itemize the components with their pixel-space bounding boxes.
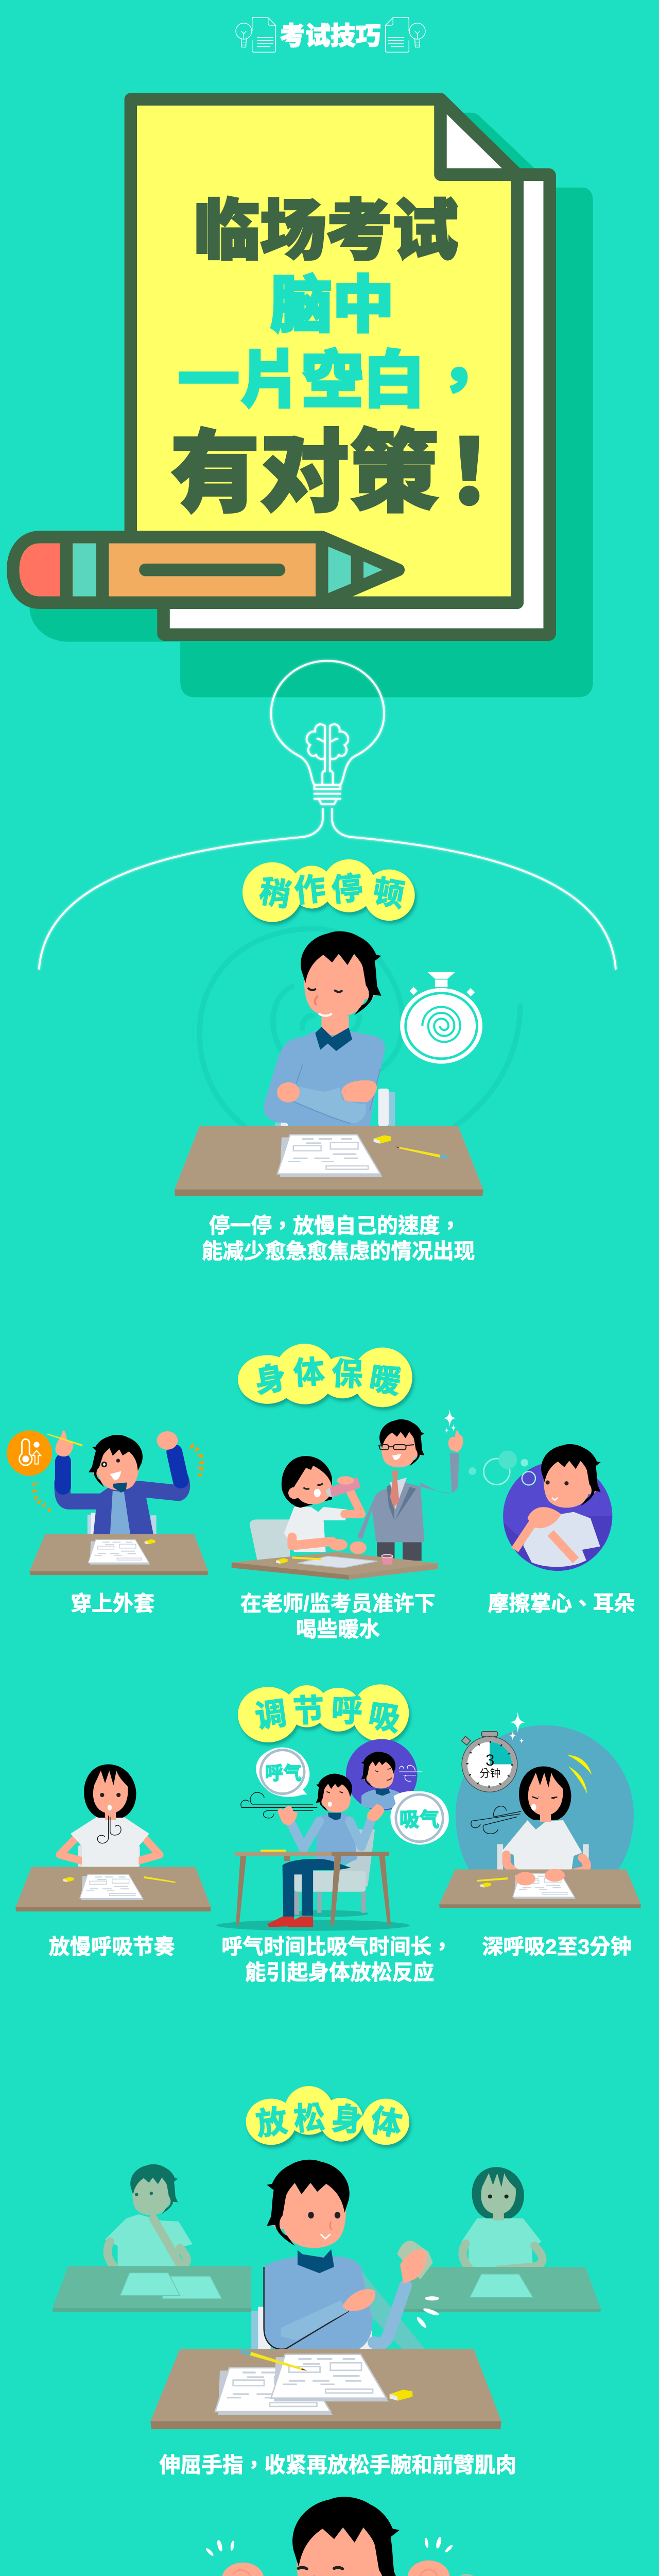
wind lines <box>471 1806 521 1834</box>
shirt <box>461 2217 541 2267</box>
blue circle <box>456 1725 634 1870</box>
back white sheet <box>164 175 550 635</box>
chair <box>251 2307 372 2349</box>
fists and pencil <box>47 1431 178 1456</box>
icon: stopwatch with spiral <box>400 972 482 1064</box>
caption: pause: 停一停，放慢自己的速度， <box>209 1214 461 1238</box>
desk <box>175 1126 483 1196</box>
title line 2: 脑中 <box>271 270 394 340</box>
badge text: 停 <box>330 870 364 908</box>
student chair <box>250 1519 290 1561</box>
wrist hand <box>342 2289 375 2311</box>
badge cloud <box>238 1344 412 1407</box>
section: header and title <box>13 18 593 697</box>
student arm <box>292 1487 361 1546</box>
hands <box>277 1080 377 1103</box>
captions: breathing: 放慢呼吸节奏 <box>49 1935 175 1959</box>
background desk left <box>53 2266 251 2312</box>
bubbles <box>469 1451 535 1485</box>
head <box>472 2167 524 2221</box>
breath swirl <box>97 1816 121 1843</box>
eraser <box>145 1539 155 1545</box>
section: keep warm and breathing <box>7 1344 641 1984</box>
arms <box>463 2244 542 2276</box>
boy stretching in jacket <box>47 1431 182 1534</box>
ghost hand <box>397 2241 433 2279</box>
title line 3: 一片空白 <box>178 346 425 415</box>
head <box>519 1767 571 1822</box>
background paper left <box>120 2273 222 2299</box>
pencil on desk <box>395 1146 448 1159</box>
face features <box>546 1480 568 1500</box>
closed eyes and mouth <box>530 1796 558 1810</box>
captions: keep warm: 穿上外套 <box>71 1592 154 1616</box>
main student stretching fingers <box>251 2160 472 2403</box>
badge text: 顿 <box>370 873 407 913</box>
speech bubble: inhale: 吸气 <box>399 1809 440 1831</box>
captions: breathing: 深呼吸2至3分钟 <box>482 1935 632 1959</box>
badge text <box>252 1354 404 1400</box>
badge cloud <box>242 859 415 922</box>
desk <box>232 1552 438 1580</box>
badge: pause <box>242 859 415 922</box>
badge text: 调 <box>253 1696 289 1734</box>
green shadow behind notepaper <box>180 113 593 697</box>
teacher lapel and tie <box>387 1471 416 1520</box>
student head <box>282 1456 332 1508</box>
pink bottle <box>326 1476 360 1497</box>
yellow front sheet <box>131 99 517 603</box>
exam paper <box>88 1540 150 1565</box>
legs <box>236 1856 391 1925</box>
wire right from bulb <box>332 809 616 969</box>
sparkles <box>509 1711 525 1744</box>
captions: keep warm: 在老师/监考员准许下 <box>240 1592 436 1616</box>
head <box>541 1444 601 1508</box>
eyes and mouth <box>375 1769 392 1780</box>
section: relax body <box>53 2086 601 2576</box>
badge text: 保 <box>331 1356 363 1393</box>
smiling man with fists <box>198 2497 466 2576</box>
badge: breathing <box>238 1684 409 1742</box>
motion ticks <box>415 2296 440 2329</box>
page fold <box>440 99 517 175</box>
head <box>130 2164 178 2215</box>
badge text <box>257 870 407 913</box>
purple circle <box>503 1462 612 1571</box>
teacher head <box>379 1419 424 1467</box>
arms <box>507 1855 587 1877</box>
purple circle <box>346 1739 418 1810</box>
arms <box>290 1821 371 1849</box>
boy inset in purple circle <box>346 1739 422 1810</box>
crossed arm <box>293 1086 366 1124</box>
paper on desk <box>298 1556 377 1568</box>
collar <box>375 1789 390 1796</box>
sweater <box>264 1031 385 1126</box>
fists <box>222 2561 449 2576</box>
icon: pencil <box>13 537 398 603</box>
title line 4: 有对策 <box>170 423 439 523</box>
badge: relax <box>246 2086 409 2145</box>
collar <box>298 2249 334 2273</box>
wire left from bulb <box>39 809 323 969</box>
paper, pencil, eraser, hands <box>477 1869 576 1899</box>
header: exam tips <box>236 18 425 52</box>
teacher OK hand <box>448 1430 463 1452</box>
motion ticks <box>205 2536 454 2557</box>
face features <box>101 1459 121 1480</box>
stopwatch: 分钟 <box>479 1768 500 1780</box>
icon: thermometer badge <box>7 1430 52 1476</box>
teacher trousers <box>377 1541 422 1561</box>
shirt <box>71 1816 149 1867</box>
chair <box>78 1845 140 1867</box>
desk <box>439 1870 641 1908</box>
decorative spiral behind boy <box>200 929 521 1126</box>
sweater <box>361 1789 403 1809</box>
fold triangle <box>440 99 517 175</box>
badge text: 稍 <box>257 873 293 913</box>
background paper right <box>470 2274 533 2297</box>
pencil and eraser <box>276 1556 321 1564</box>
exam paper <box>278 1135 383 1177</box>
eraser <box>390 2389 412 2401</box>
boy rubbing palms <box>469 1444 612 1571</box>
hands <box>329 1539 367 1554</box>
face features <box>308 2212 340 2239</box>
header title: 考试技巧 <box>280 23 381 50</box>
desk with legs <box>235 1850 391 1925</box>
face features <box>135 2192 153 2196</box>
sweater <box>316 1812 357 1863</box>
girl breathing slowly <box>60 1764 160 1867</box>
cup <box>381 1554 393 1565</box>
hands <box>278 1804 385 1825</box>
badge text <box>253 1692 403 1737</box>
title line 1: 临场考试 <box>194 194 458 268</box>
icon: document with bulb left <box>236 18 275 52</box>
speech bubble: exhale: 呼气 <box>265 1762 302 1784</box>
pencil <box>261 1850 286 1852</box>
head <box>267 2160 350 2248</box>
badge text: 暖 <box>367 1360 404 1400</box>
shirt <box>523 1512 600 1567</box>
left arm <box>62 1462 101 1501</box>
section: pause <box>39 661 616 1263</box>
chair <box>275 1089 395 1126</box>
pencil <box>239 2349 308 2371</box>
chair <box>294 1829 375 1915</box>
right arm <box>138 1452 182 1493</box>
girl deep breathing <box>456 1711 634 1877</box>
paper, eraser, pencil <box>63 1874 176 1900</box>
speech bubble: inhale <box>392 1792 447 1843</box>
ghost arm <box>361 2271 472 2403</box>
mouth <box>108 1805 112 1810</box>
title line 4: ！ <box>424 423 514 523</box>
tabletop <box>235 1852 389 1856</box>
head <box>301 931 381 1018</box>
neck <box>321 1016 349 1035</box>
wind lines white <box>399 1765 422 1781</box>
shirt <box>105 2214 193 2267</box>
background desk right <box>404 2267 601 2312</box>
badge text: 体 <box>292 1354 326 1391</box>
closed eyes, nose, smile <box>308 989 342 1016</box>
shirt front <box>110 1491 130 1534</box>
chair <box>88 1513 157 1534</box>
chair <box>497 1844 589 1870</box>
collar <box>113 1483 127 1493</box>
badge cloud <box>246 2086 409 2145</box>
left arm outline <box>264 2267 349 2349</box>
light bulb with brain <box>271 661 384 804</box>
fist <box>400 2250 427 2284</box>
title line 3: ， <box>428 346 490 415</box>
badge text: 吸 <box>366 1698 403 1737</box>
captions: breathing <box>49 1935 632 1984</box>
arms <box>60 1839 160 1863</box>
badge text: 作 <box>292 871 327 909</box>
shirt <box>501 1820 582 1870</box>
badge text <box>254 2099 405 2142</box>
right arm <box>374 2286 406 2344</box>
captions: keep warm <box>71 1592 635 1641</box>
trousers <box>283 1859 351 1917</box>
arms <box>108 2218 187 2276</box>
teacher and student <box>232 1409 463 1580</box>
caption: pause: 能减少愈急愈焦虑的情况出现 <box>202 1240 475 1263</box>
forearm <box>281 2300 349 2341</box>
icon: document with bulb right <box>386 18 425 52</box>
teacher jacket <box>357 1453 459 1542</box>
eyes and mouth <box>326 1792 343 1807</box>
badge cloud <box>238 1684 409 1742</box>
badge: keep warm <box>238 1344 412 1407</box>
student shirt <box>284 1507 346 1552</box>
speech bubble: exhale <box>257 1749 308 1795</box>
head <box>86 1431 145 1493</box>
seated boy with arms open <box>267 1774 385 1927</box>
badge text: 呼 <box>331 1692 363 1729</box>
green shadow behind pencil <box>29 605 189 642</box>
head <box>292 2497 400 2576</box>
background student right (faded) <box>461 2167 542 2276</box>
sweater <box>264 2257 372 2349</box>
stopwatch <box>462 1732 517 1792</box>
head <box>84 1764 136 1820</box>
captions: keep warm: 摩擦掌心、耳朵 <box>488 1592 635 1616</box>
captions: keep warm: 喝些暖水 <box>296 1617 380 1641</box>
head <box>361 1752 395 1788</box>
jacket body <box>93 1485 153 1534</box>
neck and collar <box>328 1812 341 1820</box>
captions: breathing: 能引起身体放松反应 <box>245 1960 434 1984</box>
desk <box>15 1867 211 1911</box>
paper stack <box>215 2349 412 2415</box>
badge text: 身 <box>331 2101 363 2138</box>
arm <box>515 1518 576 1561</box>
background student left (faded) <box>105 2164 193 2276</box>
caption: flex fingers: 伸屈手指，收紧再放松手腕和前臂肌肉 <box>160 2453 516 2477</box>
main desk <box>150 2349 501 2429</box>
yellow swoosh <box>567 1755 592 1794</box>
badge text: 体 <box>368 2103 405 2142</box>
boy with crossed arms <box>264 931 395 1126</box>
sparkles <box>443 1409 456 1433</box>
hands <box>527 1507 561 1528</box>
teacher glasses and smile <box>378 1445 414 1460</box>
badge text: 放 <box>254 2103 289 2142</box>
eraser <box>374 1135 391 1144</box>
floor shadows <box>216 1910 410 1931</box>
collar <box>315 1027 352 1051</box>
captions: breathing: 呼气时间比吸气时间长， <box>221 1935 453 1959</box>
desk <box>29 1534 208 1575</box>
face features <box>299 2567 342 2576</box>
badge text: 节 <box>292 1692 325 1728</box>
caption: pause <box>202 1214 475 1263</box>
wind lines black <box>241 1792 317 1818</box>
shoes <box>267 1917 313 1927</box>
orange motion ticks <box>32 1443 204 1512</box>
darker wedge <box>504 1516 612 1571</box>
stopwatch: 3 <box>485 1751 494 1769</box>
badge text: 松 <box>292 2099 326 2137</box>
head <box>316 1774 352 1812</box>
badge text: 身 <box>252 1360 289 1399</box>
